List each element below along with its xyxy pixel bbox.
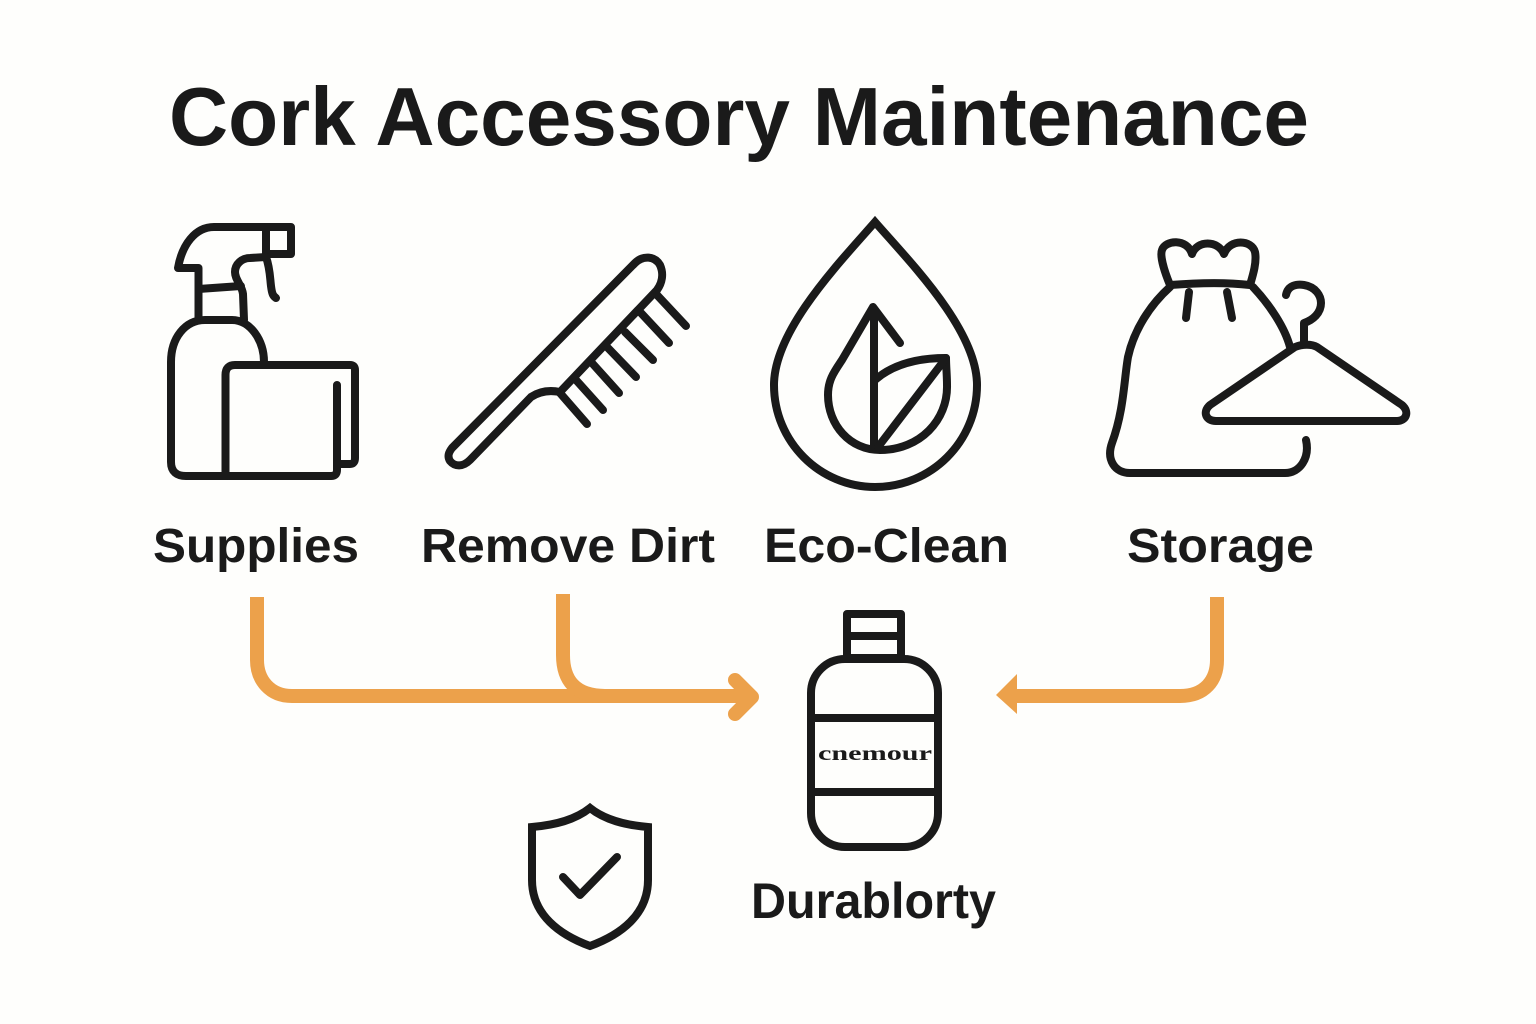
icon: spray bottle and cloth (171, 227, 355, 476)
label: durablorty: Durablorty (751, 873, 996, 929)
arrow: remove dirt to bottle (563, 594, 605, 696)
bottle label text: cnemour (818, 741, 932, 765)
arrow: supplies to bottle (257, 597, 750, 696)
label: eco-clean: Eco-Clean (764, 520, 1009, 573)
label: storage: Storage (1127, 520, 1314, 573)
icon: storage bag and hanger (1110, 242, 1406, 473)
label: supplies: Supplies (153, 520, 359, 573)
icon: brush (449, 258, 686, 465)
arrowhead: left (996, 674, 1017, 714)
icon: water drop with leaf (774, 222, 977, 487)
label: remove dirt: Remove Dirt (421, 520, 715, 573)
icon: product bottle (811, 614, 938, 847)
arrow: storage to bottle (1012, 597, 1217, 696)
title: Cork Accessory Maintenance (169, 70, 1309, 163)
icon: shield with check (532, 808, 648, 946)
arrowhead: right (735, 680, 752, 714)
